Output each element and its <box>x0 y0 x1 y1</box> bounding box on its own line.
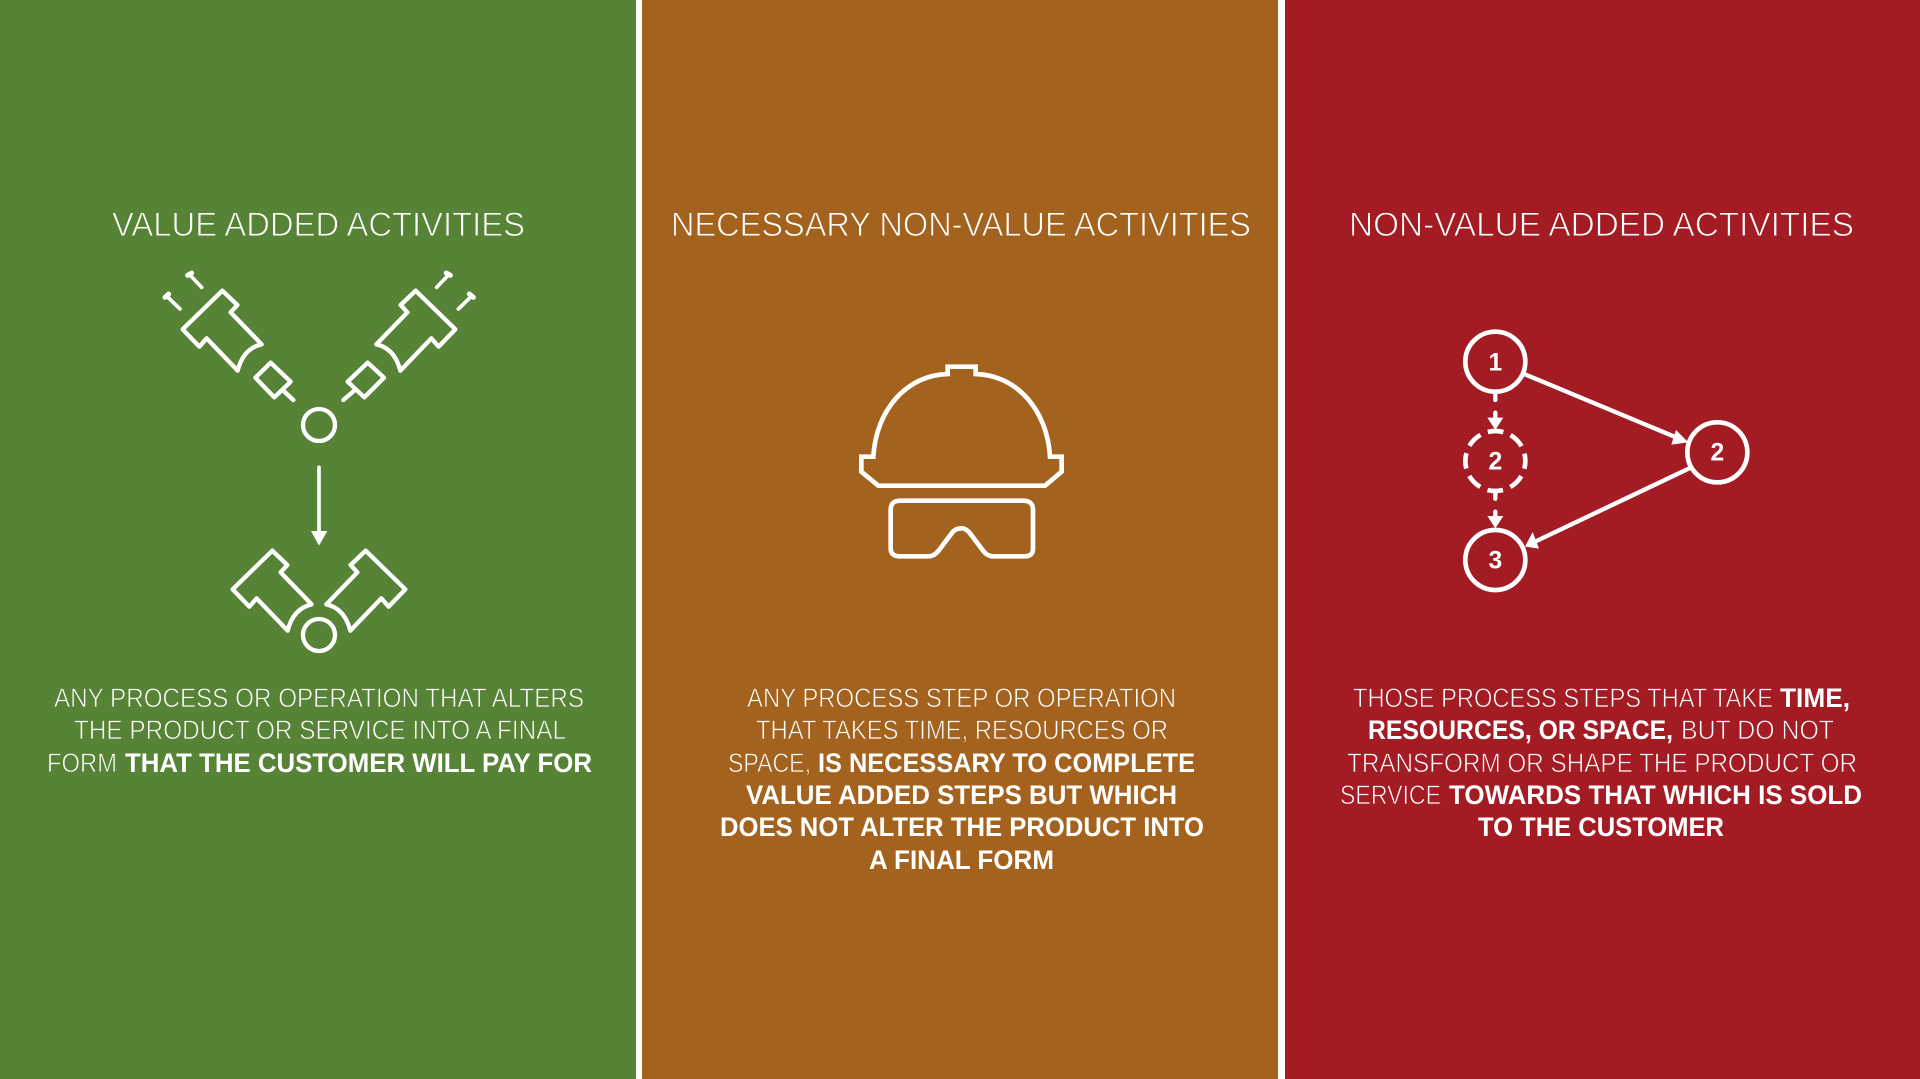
text block: non-value added description: TOWARDS THAT WHICH IS SOLD <box>1449 780 1862 810</box>
text block: value added description: THAT THE CUSTOMER WILL PAY FOR <box>125 748 592 778</box>
node 2 solid: 2 <box>1710 440 1724 467</box>
icon: upper left tool <box>183 291 262 371</box>
text block: necessary non-value description: DOES NOT ALTER THE PRODUCT INTO <box>720 812 1204 842</box>
arrow: down <box>311 467 327 546</box>
heading: necessary non-value activities: NECESSARY NON-VALUE ACTIVITIES <box>671 206 1251 244</box>
text block: necessary non-value description: VALUE ADDED STEPS BUT WHICH <box>746 780 1177 810</box>
text block: value added description: ANY PROCESS OR OPERATION THAT ALTERS <box>54 683 584 713</box>
text block: necessary non-value description: IS NECESSARY TO COMPLETE <box>818 748 1195 778</box>
text block: non-value added description: TRANSFORM OR SHAPE THE PRODUCT OR <box>1347 748 1857 778</box>
text block: non-value added description: RESOURCES, OR SPACE, <box>1368 715 1673 745</box>
panel: value added activities <box>0 0 636 1079</box>
text block: non-value added description <box>1340 683 1862 842</box>
icon: right part with pin <box>343 363 384 400</box>
icon: upper circle <box>303 409 335 441</box>
node 3: 3 <box>1488 547 1502 574</box>
arrow: node 1 to dashed node 2 <box>1487 395 1503 430</box>
text block: necessary non-value description: THAT TAKES TIME, RESOURCES OR <box>756 715 1168 745</box>
icon: lower circle <box>303 619 335 651</box>
text block: value added description: THE PRODUCT OR SERVICE INTO A FINAL <box>74 715 566 745</box>
text block: non-value added description: TIME, <box>1780 683 1850 713</box>
icon: goggles <box>891 501 1033 556</box>
panel: necessary non-value activities <box>642 0 1278 1079</box>
icon: robot arms joining a part <box>165 273 473 651</box>
panel: non-value added activities <box>1285 0 1920 1079</box>
node 2 solid <box>1687 422 1747 482</box>
icon: process flow diagram <box>1465 332 1747 590</box>
panel background green <box>0 0 636 1079</box>
text block: necessary non-value description: ANY PROCESS STEP OR OPERATION <box>747 683 1176 713</box>
heading: value added activities: VALUE ADDED ACTIVITIES <box>112 206 525 244</box>
panel background orange <box>642 0 1278 1079</box>
heading: non-value added activities: NON-VALUE ADDED ACTIVITIES <box>1349 206 1854 244</box>
icon: nails <box>165 273 473 309</box>
node 2 dashed: 2 <box>1488 449 1502 476</box>
icon: lower left tool <box>233 551 312 631</box>
text block: non-value added description: TO THE CUSTOMER <box>1478 812 1724 842</box>
text block: necessary non-value description <box>720 683 1204 875</box>
node 1: 1 <box>1488 349 1502 376</box>
arrow: node 1 to node 2 <box>1525 374 1688 445</box>
text block: non-value added description: THOSE PROCESS STEPS THAT TAKE <box>1353 683 1773 713</box>
node 1 <box>1465 332 1525 392</box>
text block: value added description <box>47 683 592 778</box>
panel background red <box>1285 0 1920 1079</box>
text block: value added description: FORM <box>47 748 117 778</box>
node 3 <box>1465 530 1525 590</box>
node 2 dashed <box>1465 431 1525 491</box>
icon: hard hat <box>861 367 1062 486</box>
text block: necessary non-value description: A FINAL FORM <box>869 845 1054 875</box>
arrow: node 2 to node 3 <box>1525 468 1689 549</box>
text block: necessary non-value description: SPACE, <box>728 748 811 778</box>
icon: upper right tool <box>376 291 455 371</box>
icon: lower right tool <box>326 551 405 631</box>
text block: non-value added description: BUT DO NOT <box>1681 715 1834 745</box>
icon: hard hat and goggles <box>861 367 1062 556</box>
icon: left part with pin <box>255 363 293 400</box>
text block: non-value added description: SERVICE <box>1340 780 1441 810</box>
arrow: dashed node 2 to node 3 <box>1487 491 1503 528</box>
